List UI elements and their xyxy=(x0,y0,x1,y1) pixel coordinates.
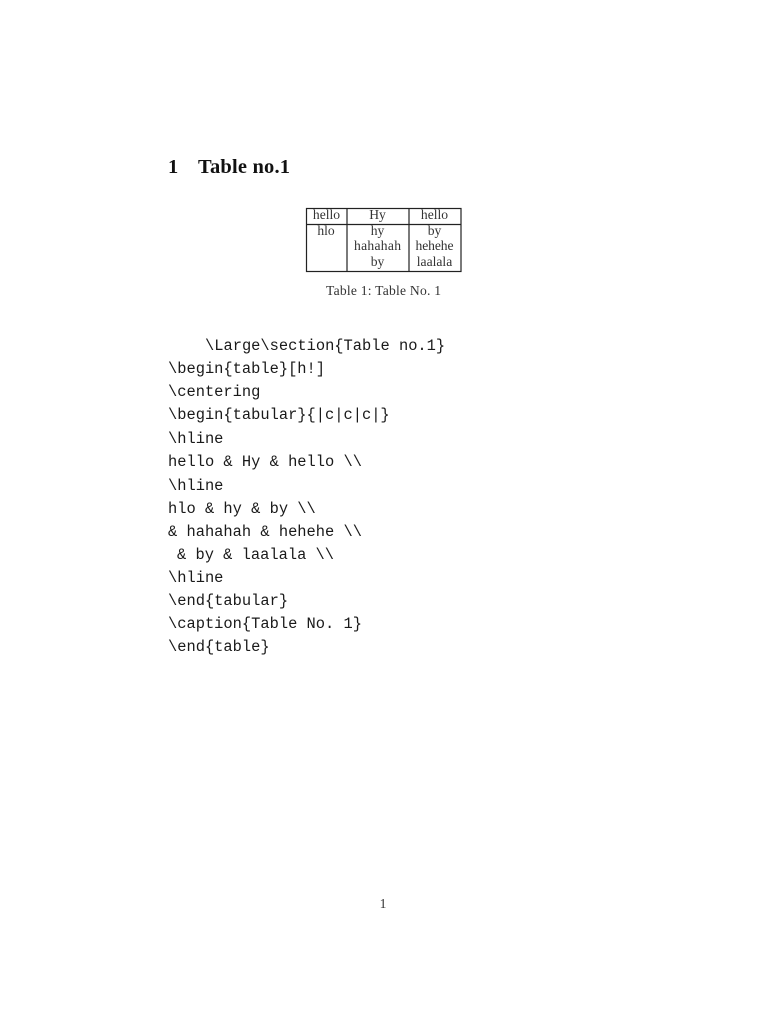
LaTeX source code block: hlo & hy & by \\ xyxy=(168,500,316,518)
table xyxy=(306,207,461,272)
table: hehehe xyxy=(416,238,454,253)
LaTeX source code block: \Large\section{Table no.1} xyxy=(205,337,445,355)
table: hy xyxy=(371,223,384,238)
LaTeX source code block: hello & Hy & hello \\ xyxy=(168,453,362,471)
section heading: Table no.1 xyxy=(198,156,290,178)
table: hahahah xyxy=(354,238,401,253)
LaTeX source code block: \hline xyxy=(168,569,223,587)
LaTeX source code block: \hline xyxy=(168,477,223,495)
table: hello xyxy=(313,207,340,222)
table: Hy xyxy=(369,207,386,222)
LaTeX source code block: & by & laalala \\ xyxy=(177,546,334,564)
LaTeX source code block: \begin{tabular}{|c|c|c|} xyxy=(168,406,390,424)
table: by xyxy=(371,254,384,269)
LaTeX source code block: \end{tabular} xyxy=(168,592,288,610)
LaTeX source code block: \hline xyxy=(168,430,223,448)
table: by xyxy=(428,223,442,238)
table: laalala xyxy=(417,254,452,269)
section heading: 1 xyxy=(168,156,178,178)
LaTeX source code block: & hahahah & hehehe \\ xyxy=(168,523,362,541)
page number: 1 xyxy=(380,896,386,911)
LaTeX source code block: \end{table} xyxy=(168,638,270,656)
LaTeX source code block: \centering xyxy=(168,383,260,401)
LaTeX source code block: \caption{Table No. 1} xyxy=(168,615,362,633)
table: hello xyxy=(421,207,448,222)
table caption: Table 1: Table No. 1 xyxy=(326,283,441,298)
table: hlo xyxy=(317,223,335,238)
LaTeX source code block: \begin{table}[h!] xyxy=(168,360,325,378)
LaTeX source code block xyxy=(168,337,445,656)
